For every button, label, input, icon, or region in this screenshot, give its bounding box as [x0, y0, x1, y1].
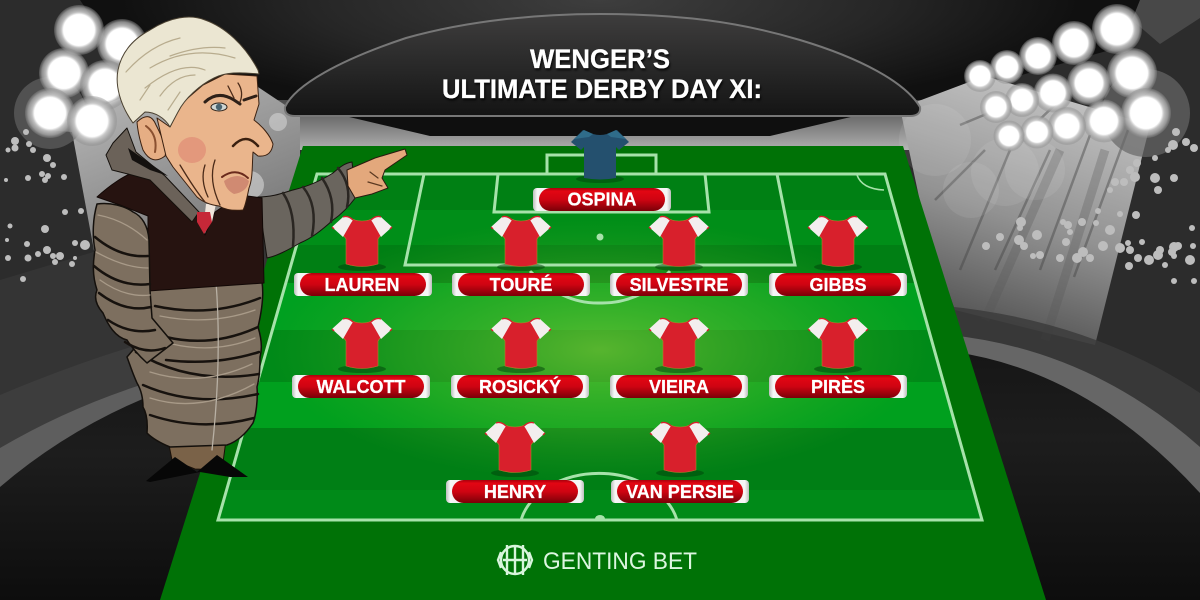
stand behind the goal [270, 100, 930, 150]
player: Gibbs: GIBBS [809, 275, 867, 295]
player: Pirès: PIRÈS [811, 376, 865, 397]
pointing arm [258, 149, 407, 258]
player: Pirès [769, 318, 907, 398]
player: Henry: HENRY [484, 482, 546, 502]
Genting Bet logo [498, 545, 697, 575]
player: Silvestre: SILVESTRE [630, 275, 728, 295]
left sleeve [93, 203, 173, 363]
stand rings left [0, 320, 240, 600]
label: Ospina [533, 188, 671, 211]
ear [137, 117, 166, 160]
player: Touré: TOURÉ [490, 274, 552, 295]
player: Gibbs [769, 216, 907, 296]
floodlights right [899, 4, 1190, 345]
player: Vieira: VIEIRA [649, 377, 709, 397]
label: Ospina: OSPINA [567, 190, 637, 210]
player: Van Persie: VAN PERSIE [626, 482, 734, 502]
player: Walcott [292, 318, 430, 398]
vest [97, 172, 264, 291]
floodlights left [14, 5, 300, 292]
bottom spot [595, 515, 605, 519]
lips [224, 176, 249, 194]
coat highlights [150, 282, 255, 450]
stand rings right [945, 306, 1200, 600]
player: Rosický [451, 318, 589, 398]
player: Touré [452, 216, 590, 296]
hood collar [106, 128, 199, 222]
player: Lauren: LAUREN [324, 275, 400, 295]
pitch stripes [200, 174, 1000, 520]
player: Vieira [610, 318, 748, 398]
player: Silvestre [610, 216, 748, 296]
eye [211, 103, 227, 111]
goalkeeper shirt [571, 130, 629, 183]
shoes and trousers [146, 440, 248, 482]
centre spot [596, 234, 604, 240]
Wenger caricature [93, 17, 407, 482]
pitch [160, 146, 1046, 600]
title second line: ULTIMATE DERBY DAY XI: [442, 74, 762, 104]
player: Rosický: ROSICKÝ [479, 376, 561, 397]
coat quilting [136, 298, 260, 424]
face lines [180, 83, 258, 205]
cheek blush [178, 137, 206, 163]
player: Lauren [294, 216, 432, 296]
player: Walcott: WALCOTT [317, 377, 405, 397]
title banner [285, 14, 920, 136]
coat lower body [127, 282, 263, 447]
light specks [4, 128, 1198, 284]
shirt and tie [204, 204, 216, 222]
face [157, 74, 273, 210]
title text: WENGER’S [530, 44, 670, 74]
logo wordmark: GENTING BET [543, 548, 697, 575]
logo emblem [498, 545, 532, 575]
player: Henry [446, 422, 584, 503]
hair shading [126, 38, 235, 110]
pitch markings [218, 155, 982, 520]
hair [117, 17, 259, 127]
player: Van Persie [611, 422, 749, 503]
